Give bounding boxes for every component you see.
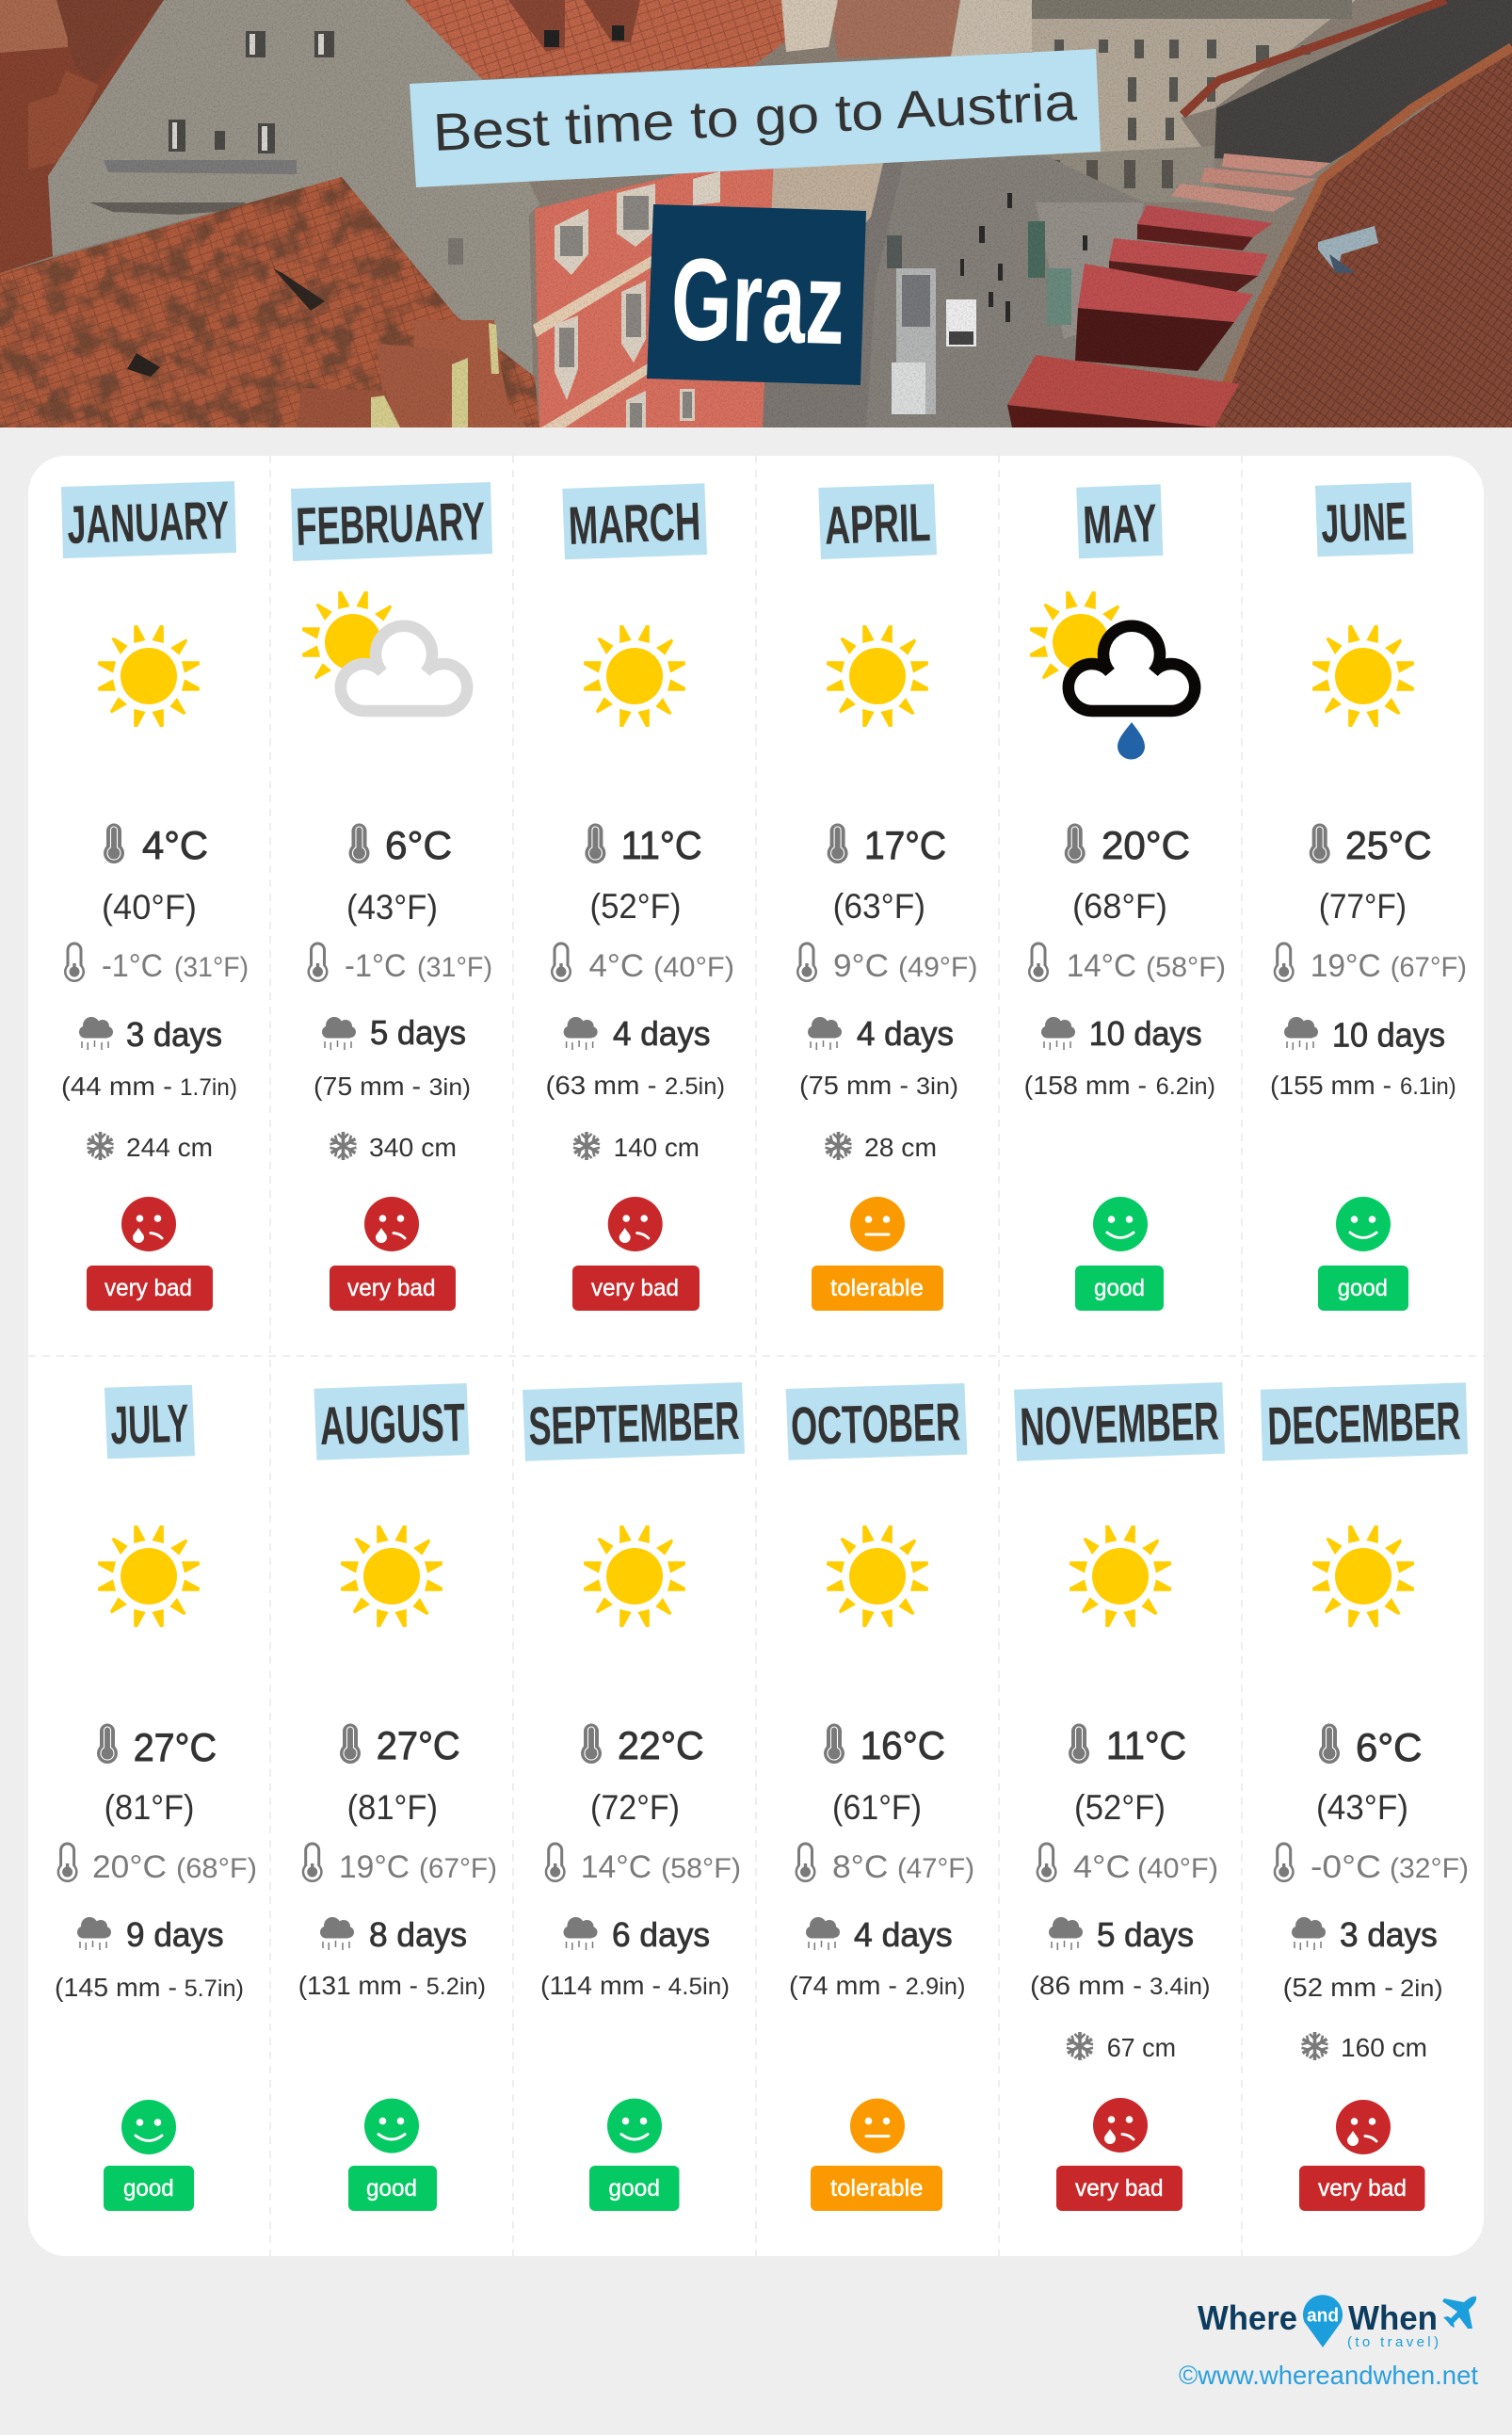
month column: February (291, 482, 492, 1311)
rainy days and rainfall: (114 mm - (540, 1971, 661, 2000)
icon: sun (827, 625, 928, 727)
low temperature: 4°C (589, 948, 644, 984)
snowfall (86, 1132, 213, 1162)
month column: March (546, 483, 734, 1311)
low temperature: 9°C (833, 948, 889, 984)
low temperature: 4°C (1073, 1849, 1130, 1885)
low temperature: -1°C (345, 948, 407, 984)
copyright url: ©www.whereandwhen.net (1179, 2361, 1478, 2390)
high temperature (581, 1723, 704, 1827)
rainy days and rainfall: 2in) (1400, 1975, 1443, 2002)
month label: May: MAY (1082, 493, 1158, 556)
snowfall: 244 cm (126, 1133, 213, 1162)
low temperature: (58°F) (1146, 952, 1226, 983)
rainy days and rainfall: (75 mm - (799, 1071, 909, 1100)
high temperature: (43°F) (1316, 1788, 1408, 1827)
high temperature: 27°C (377, 1723, 460, 1767)
month column: May (1024, 484, 1226, 1311)
rating badge (811, 2166, 942, 2211)
icon: sun (341, 1525, 442, 1627)
rating face (121, 2100, 176, 2154)
low temperature (64, 942, 249, 984)
month label: October (786, 1383, 967, 1460)
rating badge: good (366, 2175, 417, 2201)
high temperature (97, 1723, 217, 1827)
low temperature (551, 942, 734, 984)
icon: sun behind grey cloud (302, 591, 467, 711)
low temperature: 8°C (832, 1849, 888, 1885)
rainy days and rainfall (789, 1915, 966, 2000)
low temperature (1274, 942, 1467, 984)
low temperature: (40°F) (1137, 1853, 1218, 1884)
month label: April (818, 484, 937, 559)
rainy days and rainfall: 6 days (612, 1915, 710, 1954)
hero photo: Graz rooftops (0, 0, 1512, 427)
rainy days and rainfall: 3 days (126, 1015, 222, 1054)
snowfall: 28 cm (864, 1133, 937, 1162)
snowfall (1300, 2032, 1427, 2062)
high temperature: 6°C (385, 823, 452, 867)
high temperature (824, 1723, 945, 1827)
rainy days and rainfall: 2.5in) (665, 1073, 725, 1100)
high temperature (102, 823, 208, 927)
rating badge (1318, 1266, 1408, 1311)
low temperature: 19°C (339, 1849, 410, 1885)
low temperature (307, 942, 492, 984)
icon: sun (98, 1525, 200, 1627)
rainy days and rainfall (1283, 1915, 1443, 2002)
rainy days and rainfall: (131 mm - (298, 1971, 418, 2000)
rating badge: very bad (591, 1275, 679, 1301)
high temperature: 6°C (1356, 1725, 1422, 1769)
logo: Where and When (to travel): When (1348, 2298, 1438, 2337)
high temperature: 11°C (1106, 1723, 1186, 1767)
high temperature (585, 823, 702, 926)
rainy days and rainfall (1024, 1014, 1215, 1100)
rainy days and rainfall: 2.9in) (906, 1974, 966, 2000)
high temperature: (40°F) (102, 888, 197, 927)
high temperature: 27°C (134, 1725, 217, 1769)
rainy days and rainfall (546, 1014, 725, 1100)
low temperature: (68°F) (176, 1853, 257, 1884)
rating badge (589, 2166, 680, 2211)
month label: September (523, 1382, 745, 1461)
icon: sun (98, 625, 200, 727)
rating face (1093, 2098, 1148, 2153)
high temperature: 20°C (1102, 823, 1190, 867)
month label: March (562, 483, 707, 559)
month label: January: JANUARY (66, 491, 230, 556)
rainy days and rainfall: 4.5in) (668, 1974, 730, 2000)
rating face (364, 1197, 419, 1251)
rainy days and rainfall: 5 days (370, 1013, 466, 1052)
high temperature: (81°F) (105, 1788, 194, 1827)
rating badge: tolerable (830, 1275, 924, 1301)
high temperature (828, 823, 946, 926)
high temperature (346, 823, 452, 927)
icon: sun (1070, 1525, 1171, 1627)
rainy days and rainfall: (86 mm - (1030, 1971, 1142, 2000)
rating face (1336, 2100, 1391, 2154)
rating badge: very bad (105, 1275, 192, 1301)
snowfall: 160 cm (1341, 2033, 1427, 2062)
rating badge: very bad (1318, 2175, 1407, 2201)
rating badge: good (1094, 1275, 1145, 1301)
low temperature (545, 1842, 741, 1885)
low temperature (1028, 942, 1226, 984)
rating badge (1056, 2166, 1182, 2211)
high temperature (1316, 1723, 1422, 1827)
calendar panel (28, 456, 1484, 2256)
month column: June (1270, 482, 1467, 1311)
low temperature: (67°F) (419, 1853, 497, 1884)
rainy days and rainfall: (155 mm - (1270, 1071, 1391, 1100)
low temperature: 14°C (581, 1849, 651, 1885)
month column: September (523, 1382, 745, 2211)
high temperature: 4°C (142, 823, 208, 867)
rating badge: very bad (347, 1275, 435, 1301)
month column: April (796, 484, 977, 1311)
rating face (850, 1197, 905, 1251)
month label: September: SEPTEMBER (528, 1391, 740, 1457)
low temperature: 20°C (92, 1849, 167, 1885)
rainy days and rainfall: 10 days (1332, 1015, 1445, 1055)
rainy days and rainfall: (74 mm - (789, 1971, 897, 2000)
snowfall: 140 cm (614, 1133, 700, 1162)
high temperature: 17°C (864, 823, 946, 867)
month column: December (1261, 1382, 1469, 2211)
logo: Where and When (to travel): and (1307, 2305, 1339, 2326)
rainy days and rainfall (1270, 1015, 1456, 1100)
rainy days and rainfall: 5.2in) (426, 1974, 486, 2000)
icon: airplane (1442, 2297, 1476, 2329)
high temperature: (68°F) (1072, 887, 1167, 926)
high temperature (1310, 823, 1432, 926)
high temperature: (61°F) (832, 1788, 922, 1827)
low temperature: (31°F) (417, 952, 492, 983)
rainy days and rainfall (298, 1915, 486, 2000)
icon: sun (827, 1525, 928, 1627)
rainy days and rainfall: (52 mm - (1283, 1973, 1393, 2002)
rainy days and rainfall (799, 1014, 958, 1100)
icon: sun (584, 625, 685, 727)
low temperature (795, 1842, 974, 1885)
high temperature: 16°C (861, 1723, 945, 1767)
month label: June: JUNE (1320, 492, 1407, 555)
month column: November (1014, 1382, 1225, 2211)
high temperature: (63°F) (833, 887, 925, 926)
title banner: Best time to go to Austria (410, 49, 1101, 187)
rating badge (87, 1266, 213, 1311)
month label: November: NOVEMBER (1019, 1391, 1220, 1458)
month column: January (61, 481, 249, 1311)
low temperature: 14°C (1067, 948, 1136, 984)
rating badge: very bad (1075, 2175, 1164, 2201)
month label: November (1014, 1382, 1225, 1461)
snowfall: 340 cm (369, 1133, 457, 1162)
low temperature: (40°F) (653, 952, 734, 983)
rating badge (1075, 1266, 1164, 1311)
rating face (1093, 1197, 1148, 1251)
rainy days and rainfall (55, 1915, 244, 2002)
month label: June (1315, 482, 1413, 556)
rainy days and rainfall: 3 days (1340, 1915, 1438, 1954)
rainy days and rainfall: 5.7in) (185, 1975, 244, 2002)
logo: Where and When (to travel): Where (1198, 2298, 1297, 2337)
city badge: Graz: Graz (669, 234, 846, 369)
month label: July: JULY (109, 1394, 189, 1456)
rainy days and rainfall: (145 mm - (55, 1973, 177, 2002)
logo: Where and When (to travel): (to travel) (1347, 2334, 1439, 2350)
rating badge (348, 2166, 437, 2211)
rainy days and rainfall: 6.2in) (1156, 1073, 1215, 1100)
rating face (850, 2099, 905, 2153)
icon: map pin (1303, 2295, 1343, 2347)
rating badge: tolerable (830, 2175, 923, 2201)
month label: April: APRIL (824, 492, 931, 556)
icon: sun (1312, 1525, 1414, 1627)
rainy days and rainfall: 3in) (429, 1074, 471, 1101)
rating badge (104, 2166, 194, 2211)
rainy days and rainfall: 4 days (613, 1014, 710, 1053)
icon: sun (584, 1525, 685, 1627)
rating badge: good (608, 2175, 660, 2201)
rainy days and rainfall (314, 1013, 471, 1101)
month label: January (61, 481, 236, 558)
high temperature: (77°F) (1319, 887, 1407, 926)
low temperature: (67°F) (1391, 952, 1467, 983)
snowfall: 67 cm (1107, 2033, 1176, 2062)
title banner: Best time to go to Austria: Best time to go to Austria (432, 72, 1079, 162)
month label: May (1076, 484, 1163, 558)
snowfall (824, 1132, 937, 1162)
month column: July (55, 1385, 257, 2211)
rainy days and rainfall: 1.7in) (180, 1074, 237, 1101)
rating badge: good (123, 2175, 174, 2201)
high temperature: 22°C (618, 1723, 704, 1767)
high temperature: 11°C (621, 823, 702, 867)
rainy days and rainfall: 3in) (916, 1073, 958, 1100)
low temperature: (49°F) (898, 952, 977, 983)
rating face (607, 2099, 662, 2153)
month label: February (291, 482, 492, 561)
month label: February: FEBRUARY (295, 492, 486, 557)
rainy days and rainfall: (44 mm - (61, 1072, 172, 1101)
rating badge (330, 1266, 456, 1311)
rating face (608, 1197, 663, 1251)
month label: August (314, 1383, 470, 1460)
high temperature: (52°F) (1074, 1788, 1166, 1827)
high temperature: (81°F) (347, 1788, 438, 1827)
month label: August: AUGUST (319, 1393, 466, 1457)
snowfall (329, 1132, 457, 1162)
rainy days and rainfall: 5 days (1097, 1915, 1194, 1954)
high temperature (340, 1723, 460, 1827)
low temperature (302, 1842, 497, 1885)
low temperature (1037, 1842, 1218, 1885)
rainy days and rainfall (540, 1915, 730, 2000)
low temperature: (58°F) (661, 1853, 741, 1884)
rainy days and rainfall: 6.1in) (1400, 1073, 1456, 1100)
icon: sun (1312, 625, 1414, 727)
rating face (364, 2099, 419, 2153)
low temperature: (32°F) (1390, 1853, 1469, 1884)
low temperature: -1°C (102, 948, 163, 984)
icon: sun, black cloud and raindrop (1030, 591, 1195, 759)
high temperature (1065, 823, 1190, 926)
low temperature (796, 942, 977, 984)
rainy days and rainfall (61, 1015, 237, 1101)
rating badge (812, 1266, 943, 1311)
rainy days and rainfall: 8 days (369, 1915, 467, 1954)
low temperature (57, 1842, 257, 1885)
rainy days and rainfall: (75 mm - (314, 1072, 421, 1101)
rating face (121, 1197, 176, 1251)
high temperature (1069, 1723, 1186, 1827)
low temperature (1274, 1842, 1469, 1885)
month label: October: OCTOBER (790, 1392, 961, 1457)
high temperature: (52°F) (589, 887, 682, 926)
month label: March: MARCH (568, 492, 701, 556)
rainy days and rainfall: 3.4in) (1150, 1974, 1211, 2000)
snowfall (1065, 2032, 1176, 2062)
rainy days and rainfall: (158 mm - (1024, 1071, 1147, 1100)
low temperature: 19°C (1311, 948, 1381, 984)
city badge: Graz (647, 204, 866, 385)
rating badge: good (1338, 1275, 1388, 1301)
rating badge (572, 1266, 700, 1311)
high temperature: (72°F) (590, 1788, 680, 1827)
snowfall (571, 1132, 700, 1162)
low temperature: (47°F) (897, 1853, 974, 1884)
high temperature: 25°C (1345, 823, 1432, 867)
month label: July (105, 1385, 195, 1459)
rainy days and rainfall: 10 days (1089, 1014, 1202, 1053)
low temperature: (31°F) (174, 952, 249, 983)
rainy days and rainfall: (63 mm - (546, 1071, 657, 1100)
rainy days and rainfall (1030, 1915, 1211, 2000)
month column: October (786, 1383, 974, 2211)
low temperature: -0°C (1311, 1849, 1381, 1885)
rating badge (1299, 2166, 1425, 2211)
rating face (1336, 1197, 1391, 1251)
rainy days and rainfall: 4 days (857, 1014, 954, 1053)
rainy days and rainfall: 9 days (126, 1915, 224, 1954)
rainy days and rainfall: 4 days (854, 1915, 953, 1954)
high temperature: (43°F) (346, 888, 438, 927)
logo: Where and When (to travel) (1198, 2295, 1476, 2350)
month column: August (298, 1383, 497, 2211)
